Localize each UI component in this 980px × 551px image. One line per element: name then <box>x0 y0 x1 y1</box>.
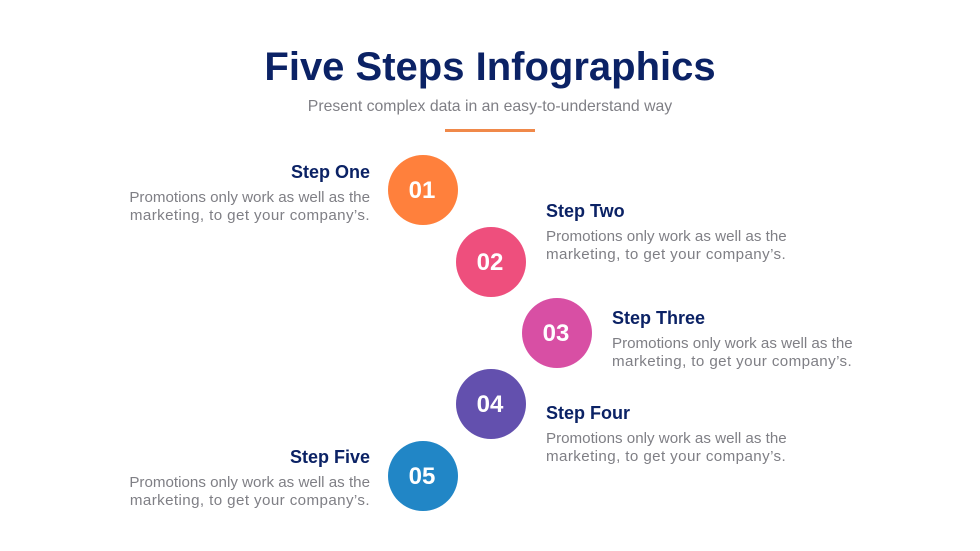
step 3 description: marketing, to get your company’s. <box>612 352 852 370</box>
step 5 description: marketing, to get your company’s. <box>130 492 370 508</box>
step 4 description: Promotions only work as well as the <box>546 430 787 447</box>
step 2 description: Promotions only work as well as the <box>546 228 787 245</box>
step 3 description: Promotions only work as well as the <box>612 335 853 352</box>
step 4 description: marketing, to get your company’s. <box>546 448 786 464</box>
step 5 description <box>129 474 370 508</box>
step 1 circle <box>388 155 458 225</box>
step 5 text <box>129 447 370 508</box>
step 5 circle <box>388 441 458 511</box>
step 1 description <box>129 189 370 224</box>
step 3 description <box>612 335 853 370</box>
step 4 circle: 04 <box>477 391 503 418</box>
step 1 heading: Step One <box>291 162 370 182</box>
subtitle: Present complex data in an easy-to-understand way <box>308 98 672 115</box>
step 4 heading: Step Four <box>546 403 630 423</box>
step 3 heading: Step Three <box>612 308 705 328</box>
step 5 heading: Step Five <box>290 447 370 467</box>
title: Five Steps Infographics <box>264 45 716 89</box>
step 1 circle: 01 <box>409 177 435 204</box>
step 5 description: Promotions only work as well as the <box>129 474 370 491</box>
step 1 description: marketing, to get your company’s. <box>130 206 370 224</box>
step 2 description <box>546 228 787 262</box>
step 4 text <box>546 403 787 464</box>
step 4 circle <box>456 369 526 439</box>
step 3 circle: 03 <box>543 320 569 347</box>
step 1 description: Promotions only work as well as the <box>129 189 370 206</box>
step 2 circle: 02 <box>477 249 503 276</box>
step 2 heading: Step Two <box>546 201 625 221</box>
step 4 description <box>546 430 787 464</box>
step 3 text <box>612 308 853 370</box>
step 2 text <box>546 201 787 262</box>
step 5 circle: 05 <box>409 463 435 490</box>
step 3 circle <box>522 298 592 368</box>
step 2 description: marketing, to get your company’s. <box>546 246 786 262</box>
step 1 text <box>129 162 370 224</box>
accent underline <box>445 129 535 132</box>
step 2 circle <box>456 227 526 297</box>
